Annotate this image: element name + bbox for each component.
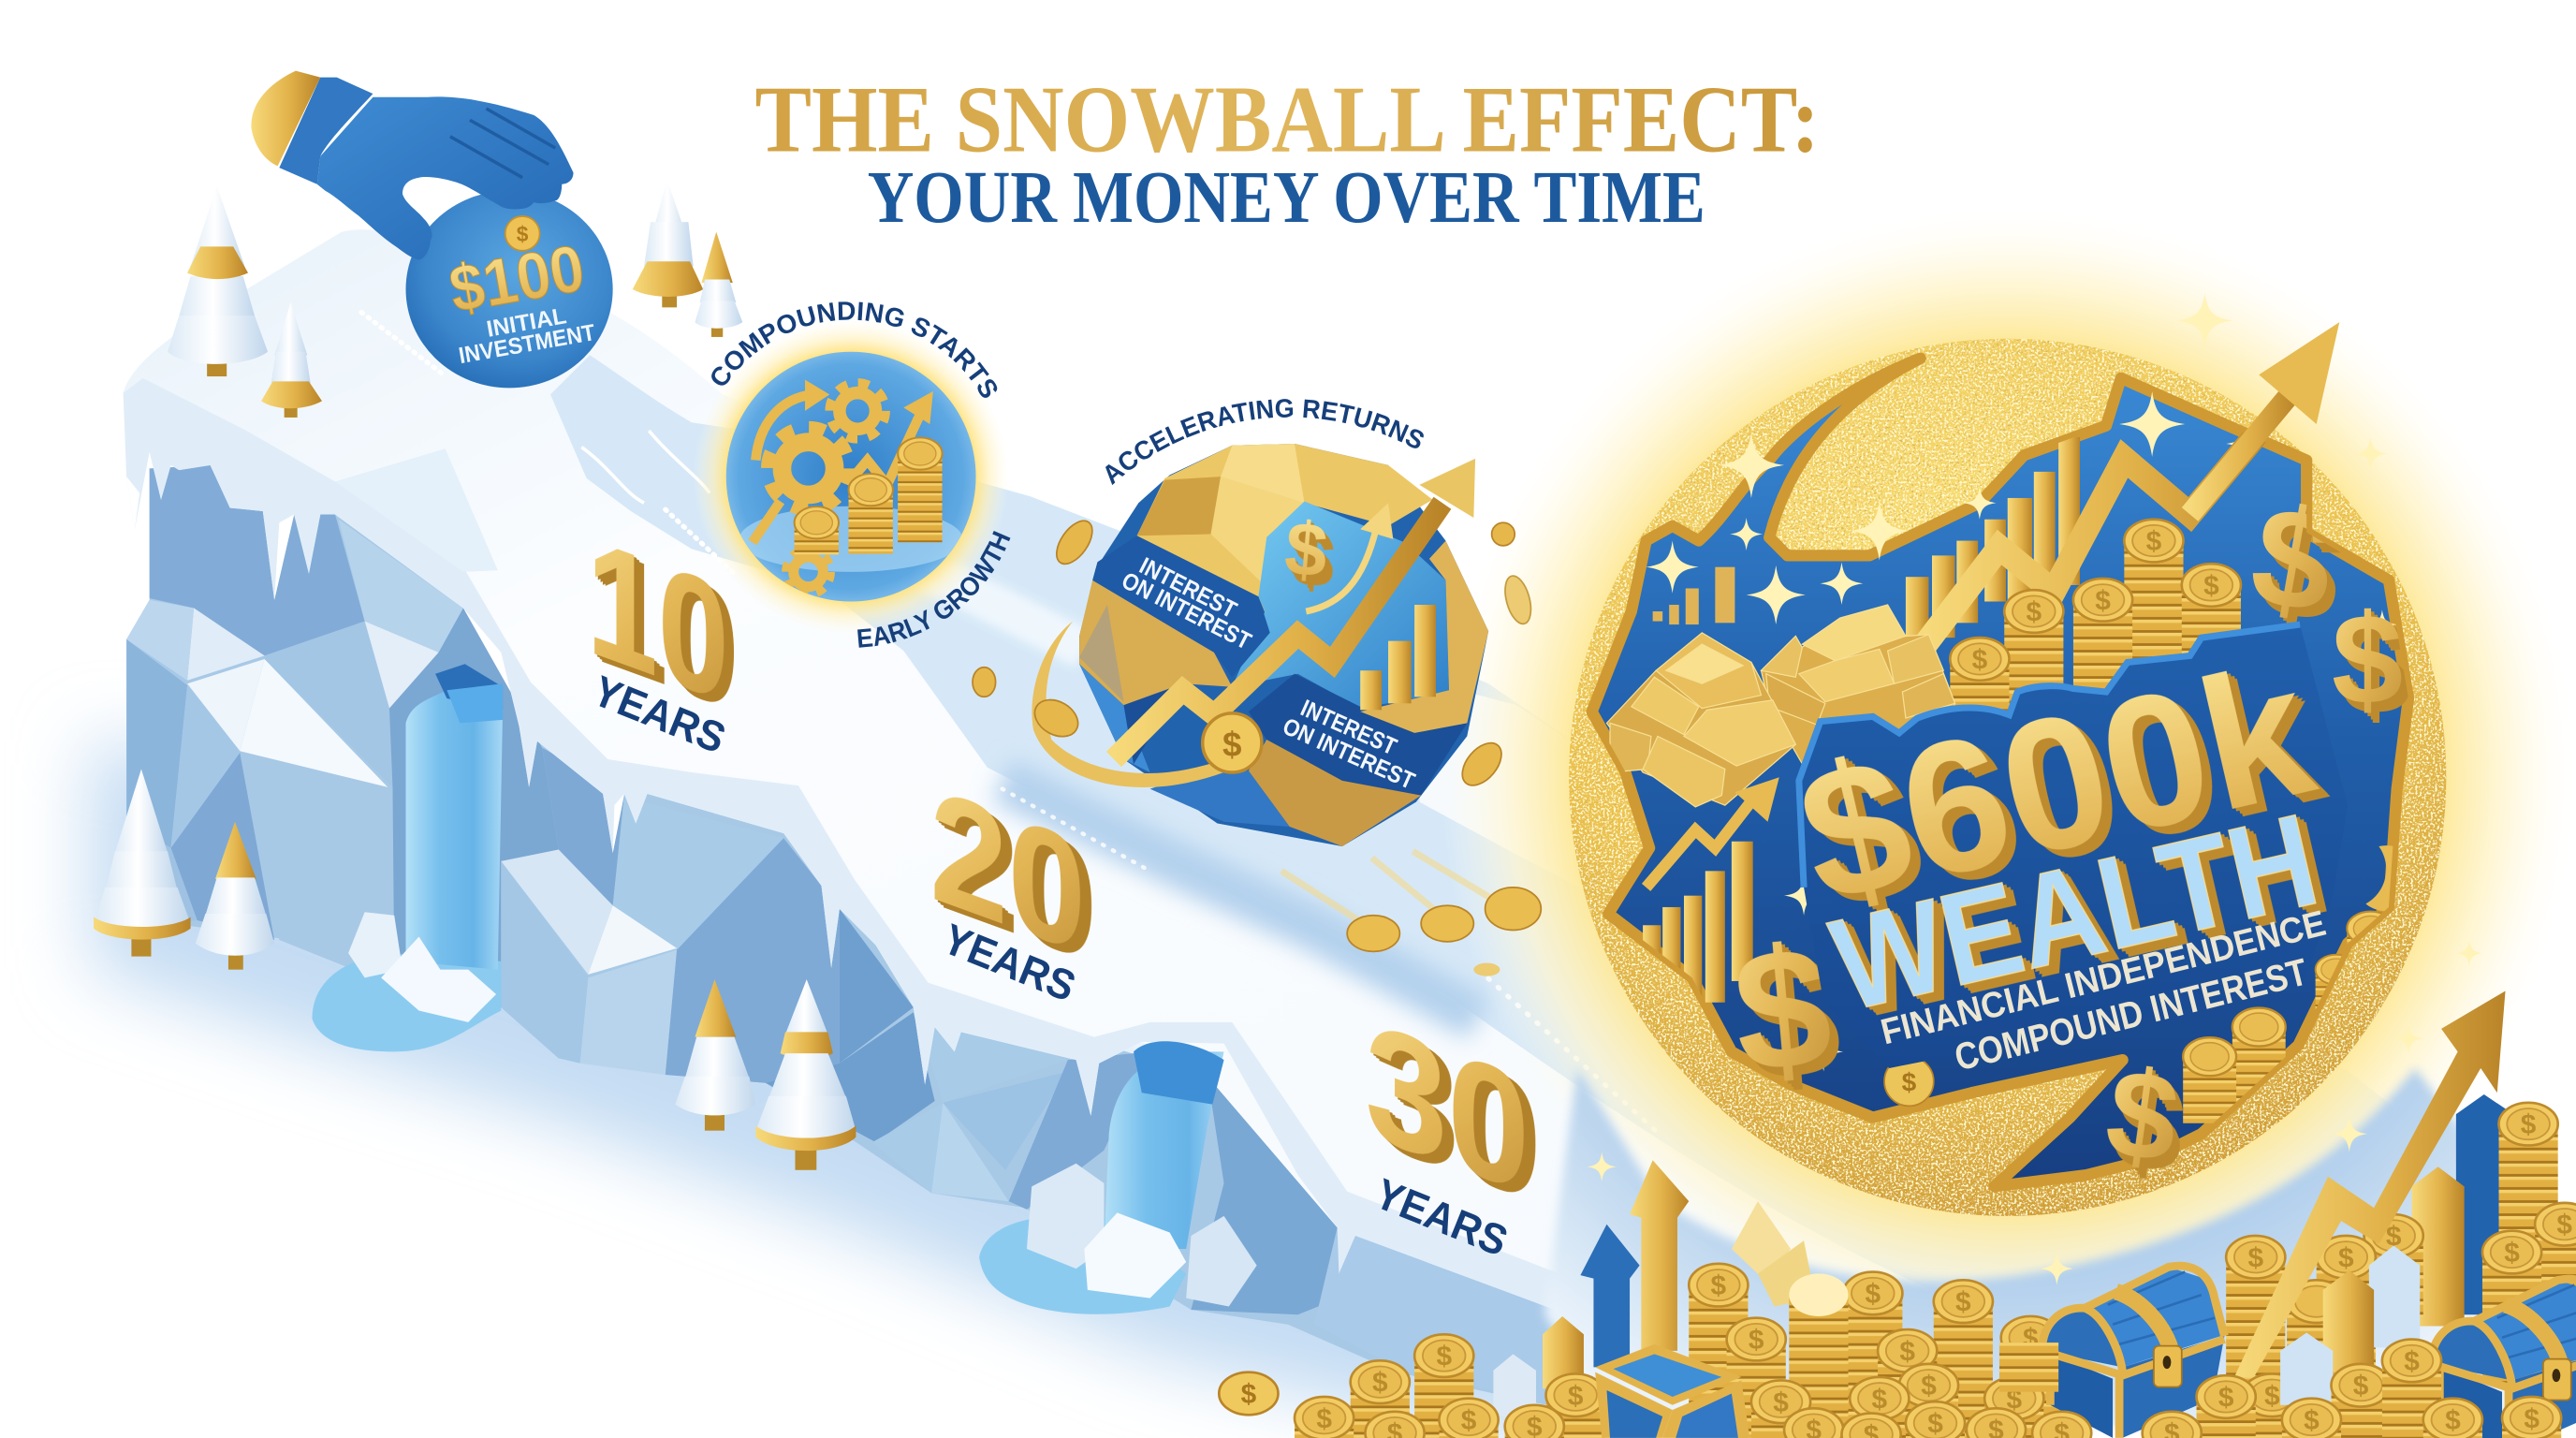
number: 10 years: 10 (587, 503, 729, 739)
back coin stacks: $ (1372, 1368, 1388, 1399)
tree 1 (168, 185, 268, 376)
shadow under big ball (1544, 1068, 2530, 1427)
front coin stacks: $ (2404, 1346, 2420, 1377)
icicle shine (126, 477, 624, 853)
front coin stacks: $ (2304, 1405, 2320, 1436)
years label: YEARS (936, 915, 1082, 1011)
coin on arrow (1203, 713, 1262, 772)
ski track (550, 355, 2513, 1414)
title line 2: YOUR MONEY OVER TIME (868, 157, 1705, 239)
highlight stars on gold (1719, 433, 1996, 561)
icon: swoosh (1032, 622, 1224, 787)
front coin stacks: $ (1461, 1405, 1477, 1436)
icon: lone coin: $ (1241, 1379, 1257, 1410)
icon: coins right (2183, 912, 2394, 1123)
tree group left top (168, 179, 742, 418)
panel: snow slope top (124, 229, 2530, 1438)
gold right (1360, 541, 1488, 733)
panel: treasure pile (1295, 990, 2576, 1438)
years label: YEARS (586, 667, 732, 763)
snow lip (124, 378, 1559, 1312)
ball: $100 initial investment (406, 191, 613, 388)
scattered golden rubble (1732, 1201, 1815, 1306)
interest on interest band 1: ON INTEREST (1118, 567, 1255, 655)
navy band 1 (1092, 536, 1270, 677)
icon: gold bars right pile (1761, 605, 1955, 772)
track white wedge right of ball (1419, 682, 1660, 929)
number: 20 years: 20 (929, 754, 1086, 988)
icon: dollar signs: $ (2241, 475, 2346, 644)
blue inner panel (1592, 359, 2408, 1186)
arrow: big rising head (2190, 322, 2339, 514)
tree 2 (261, 302, 322, 418)
flying coins (973, 515, 1541, 976)
icon: small coin (1884, 1057, 1934, 1106)
soft ground shadow (91, 740, 1643, 1438)
icon: gears (768, 384, 885, 594)
icon: lower left chart (1643, 842, 1753, 1003)
wealth word: WEALTH (1820, 785, 2330, 1039)
coin on arrow: $ (1222, 725, 1242, 763)
track dark band (1003, 781, 1479, 1019)
initial investment label (453, 300, 597, 369)
ball: $600k wealth (1569, 322, 2446, 1216)
icon: small curved arrow (1306, 503, 1393, 611)
ball: accelerating returns (1032, 399, 1488, 846)
bottom facets (1079, 664, 1150, 772)
back coin stacks: $ (2006, 1384, 2022, 1415)
back coin stacks: $ (2023, 1323, 2039, 1354)
icon: blue glove hand (251, 71, 574, 259)
interest on interest band 2 (1279, 695, 1419, 795)
tree 3 (633, 179, 703, 307)
back coin stacks: $ (1749, 1325, 1764, 1356)
interest on interest band 2: ON INTEREST (1279, 713, 1419, 795)
chest 2 (2432, 1279, 2576, 1438)
front coin stacks: $ (2353, 1371, 2369, 1401)
initial investment label: INITIAL (485, 303, 568, 343)
$100 amount: $100 (444, 230, 590, 327)
financial independence: FINANCIAL INDEPENDENCE (1877, 903, 2330, 1052)
front coins chest 1: $ (2264, 1381, 2280, 1412)
dollar below: $ (2099, 1042, 2187, 1190)
icon: crescent globe (2365, 845, 2420, 911)
back coin stacks: $ (2386, 1222, 2402, 1253)
back coin stacks: $ (1899, 1336, 1915, 1367)
icon: coin stacks (795, 437, 943, 554)
tree 4 (695, 232, 742, 337)
front coin stacks: $ (2445, 1405, 2461, 1436)
icon: dollar badge: $ (1281, 506, 1331, 594)
navy band 2 (1249, 674, 1467, 796)
chest 1 (2042, 1266, 2224, 1438)
top gold facets (1137, 444, 1432, 624)
back coin stacks: $ (1872, 1384, 1888, 1415)
back coin stacks: $ (1955, 1287, 1971, 1318)
back coin stacks: $ (1773, 1387, 1789, 1418)
tree 6 (196, 822, 274, 970)
front coin stacks: $ (2524, 1403, 2539, 1434)
light blue panel (1232, 501, 1449, 709)
back coin stacks: $ (2338, 1242, 2354, 1273)
icon: small coin: $ (517, 222, 529, 246)
icon: bars (1360, 605, 1436, 710)
front coins chest 1 (1999, 1343, 2302, 1438)
front coin stacks (1295, 1340, 2561, 1438)
track white streak (772, 501, 1084, 649)
back coin stacks: $ (1711, 1270, 1727, 1301)
front coin stacks: $ (1316, 1403, 1332, 1434)
back coin stacks: $ (1921, 1371, 1937, 1401)
icon: coin stacks: $ (1972, 644, 1988, 675)
early growth arc text: EARLY GROWTH (857, 531, 1011, 648)
icon: small coin: $ (1902, 1068, 1917, 1097)
back coin stacks: $ (2247, 1242, 2263, 1273)
icon: lone coin (1219, 1372, 1278, 1415)
back coin stacks (1351, 1103, 2576, 1438)
arrow: small zigzag (1647, 777, 1779, 888)
ball: compounding starts (699, 301, 1011, 648)
white bar (1493, 1354, 1536, 1416)
icon: arrow heads (805, 380, 933, 424)
accelerating returns arc text: ACCELERATING RETURNS (1105, 399, 1424, 485)
arrow: zigzag (2234, 990, 2506, 1377)
initial investment label: INVESTMENT (457, 320, 597, 369)
title (754, 67, 1820, 239)
sparkles around ball (1587, 293, 2482, 1285)
back coin stacks: $ (1436, 1342, 1452, 1372)
gold arrow (1630, 1160, 1689, 1351)
interest on interest band 1: INTEREST (1135, 552, 1241, 624)
pale facet on snow (335, 448, 498, 572)
arrow: rising (1114, 459, 1475, 759)
icon: small coin (505, 216, 540, 251)
glass base (739, 506, 962, 572)
back coin stacks: $ (1568, 1381, 1584, 1412)
back coin stacks: $ (1866, 1279, 1881, 1310)
years label: YEARS (1368, 1169, 1515, 1266)
icon: coin stacks: $ (2203, 570, 2219, 601)
back coin stacks: $ (2556, 1210, 2572, 1240)
big ball glow (1441, 209, 2574, 1343)
sparkles (1647, 391, 2397, 1071)
gold tall bar (2411, 1167, 2465, 1327)
scalloped plaque behind amount (1799, 624, 2348, 1068)
icon: chart bars (1906, 437, 2080, 659)
back coin stacks: $ (2504, 1238, 2520, 1269)
$600k amount: $600k (1782, 624, 2330, 944)
waterfall 2 (979, 1041, 1257, 1314)
tree 5 (94, 770, 191, 957)
track glints (581, 431, 710, 503)
number: 30 years: 30 (1365, 986, 1530, 1229)
front coins chest 1: $ (2218, 1383, 2234, 1414)
back arrows and bars (1493, 1094, 2513, 1416)
icon: coin stacks (1950, 520, 2241, 741)
tree group middle (675, 979, 856, 1170)
tree 7 (675, 979, 755, 1131)
white bar right (2280, 1333, 2333, 1405)
compounding starts arc text: COMPOUNDING STARTS (711, 301, 998, 398)
icon: coin stacks: $ (2027, 597, 2042, 628)
tree 8 (755, 979, 856, 1170)
icon: coin stacks: $ (2146, 526, 2162, 557)
gold short bar (2323, 1270, 2374, 1372)
icon: dollar signs (2241, 475, 2403, 731)
snow spray trail (361, 313, 1660, 1134)
inner contents (1606, 387, 2420, 1123)
back coin stacks: $ (2521, 1109, 2537, 1140)
tree group left bottom (94, 770, 274, 970)
compound interest: COMPOUND INTEREST (1951, 949, 2312, 1079)
icon: growth arrow (753, 394, 923, 542)
gold bar (1543, 1316, 1584, 1388)
pale bar (2369, 1246, 2420, 1347)
waterfall 1 (312, 664, 503, 1051)
base (1079, 444, 1488, 846)
blue arrow (1580, 1225, 1640, 1367)
gold bottom (1249, 740, 1421, 846)
arrow: big rising inner (1917, 433, 2265, 652)
icon: dollar signs: $ (2332, 588, 2403, 731)
icon: coin stacks: $ (2095, 585, 2111, 616)
panel: ice cliff (126, 465, 1569, 1410)
dollar left: $ (1727, 910, 1838, 1108)
open box (1595, 1344, 1749, 1438)
gold lower-left (1079, 580, 1232, 705)
interest on interest band 2: INTEREST (1296, 695, 1400, 760)
icon: gold bars left pile (1606, 633, 1795, 807)
icon: small skyline (1653, 567, 1734, 624)
title line 1: THE SNOWBALL EFFECT: (754, 67, 1820, 173)
blue tall bar (2456, 1094, 2513, 1314)
